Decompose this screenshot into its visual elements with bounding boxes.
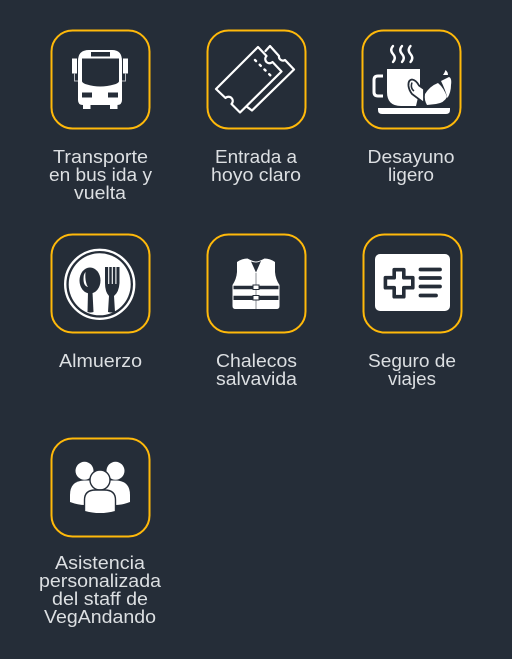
label: transport: Transporte <box>53 146 148 167</box>
label: breakfast: ligero <box>388 164 434 185</box>
icon: bus <box>72 50 128 109</box>
label: entry ticket: Entrada a <box>215 146 298 167</box>
icon: medical card <box>375 254 450 311</box>
panel: staff assistance <box>39 438 162 627</box>
icon: group of people <box>70 462 130 514</box>
icon: coffee and croissant <box>374 46 451 114</box>
panel: lunch <box>52 234 150 371</box>
panel: breakfast <box>362 30 460 185</box>
label: staff assistance: personalizada <box>39 570 162 591</box>
icon: life vest <box>232 258 280 309</box>
label: entry ticket <box>211 146 301 185</box>
icon: plate with spoon and fork <box>65 250 134 319</box>
label: staff assistance: VegAndando <box>44 606 156 627</box>
label: travel insurance: viajes <box>388 368 436 389</box>
label: breakfast <box>368 146 454 185</box>
icon: tickets <box>216 46 294 112</box>
label: transport: en bus ida y <box>49 164 153 185</box>
label: lunch: Almuerzo <box>59 350 142 371</box>
label: life jackets: salvavida <box>216 368 298 389</box>
label: transport <box>49 146 153 203</box>
label: staff assistance: del staff de <box>52 588 148 609</box>
label: life jackets: Chalecos <box>216 350 297 371</box>
panel: entry ticket <box>208 30 306 185</box>
panel: life jackets <box>208 234 306 389</box>
label: breakfast: Desayuno <box>368 146 454 167</box>
label: travel insurance <box>368 350 456 389</box>
label: entry ticket: hoyo claro <box>211 164 301 185</box>
panel: travel insurance <box>364 234 462 389</box>
label: travel insurance: Seguro de <box>368 350 456 371</box>
label: staff assistance <box>39 552 162 627</box>
label: staff assistance: Asistencia <box>55 552 146 573</box>
label: life jackets <box>216 350 298 389</box>
label: transport: vuelta <box>74 182 127 203</box>
panel: transport <box>49 30 153 203</box>
